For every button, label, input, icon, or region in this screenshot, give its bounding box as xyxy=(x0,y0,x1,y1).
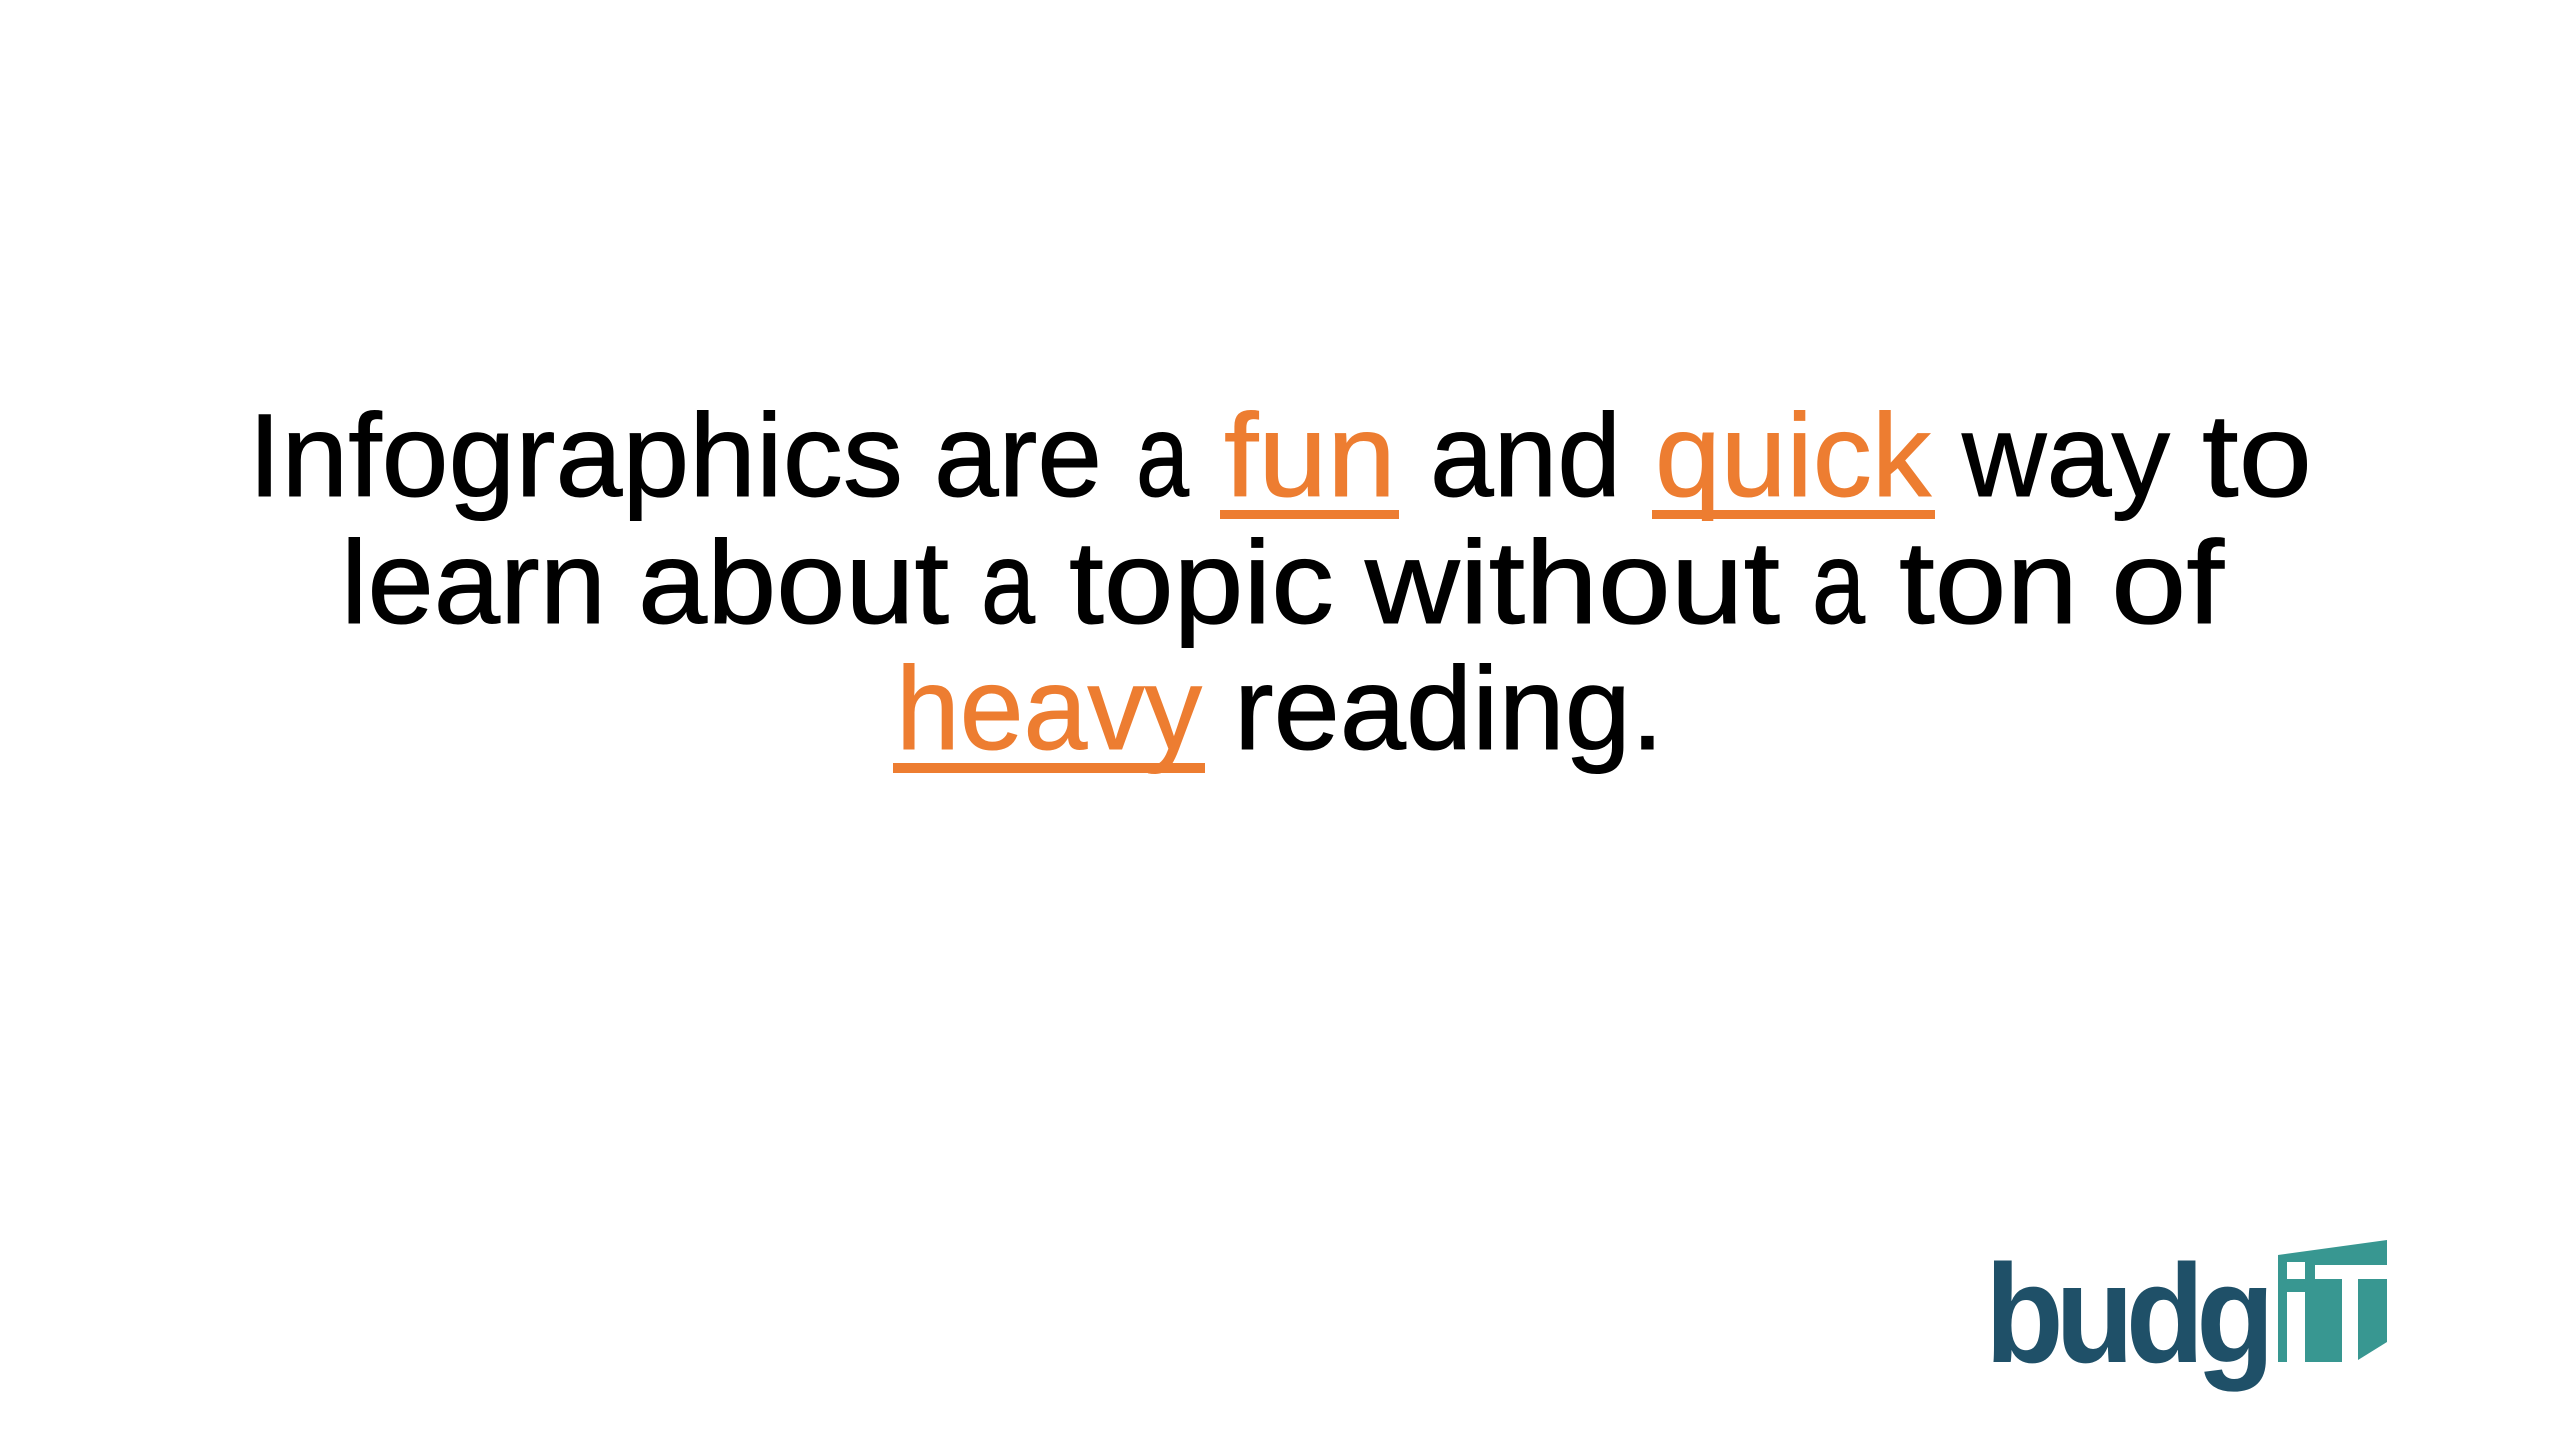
headline line 3: heavy xyxy=(896,643,1202,775)
headline line 2: about xyxy=(638,517,949,649)
headline line 2: of xyxy=(2111,517,2224,649)
headline line 2 xyxy=(341,517,2224,649)
headline line 1: fun xyxy=(1224,390,1396,522)
headline line 1: a xyxy=(1136,390,1189,522)
headline line 1: to xyxy=(2202,390,2312,522)
headline line 1: quick xyxy=(1655,390,1932,522)
logo emblem: iT building xyxy=(2278,1240,2387,1362)
headline line 2: topic xyxy=(1069,517,1334,649)
headline line 2: a xyxy=(981,517,1035,649)
logo: budgIT xyxy=(1985,1235,2387,1392)
headline line 3: reading. xyxy=(1234,643,1664,775)
headline line 1: and xyxy=(1430,390,1621,522)
logo wordmark: budg xyxy=(1985,1235,2267,1392)
headline line 1: way xyxy=(1961,390,2170,522)
headline statement xyxy=(248,390,2312,775)
headline line 2: a xyxy=(1812,517,1865,649)
headline line 1: are xyxy=(934,390,1102,522)
headline line 2: learn xyxy=(341,517,606,649)
headline line 3 xyxy=(893,643,1664,775)
headline line 1: Infographics xyxy=(248,390,903,522)
headline line 2: without xyxy=(1364,517,1780,649)
headline line 2: ton xyxy=(1899,517,2078,649)
headline line 1 xyxy=(248,390,2312,522)
